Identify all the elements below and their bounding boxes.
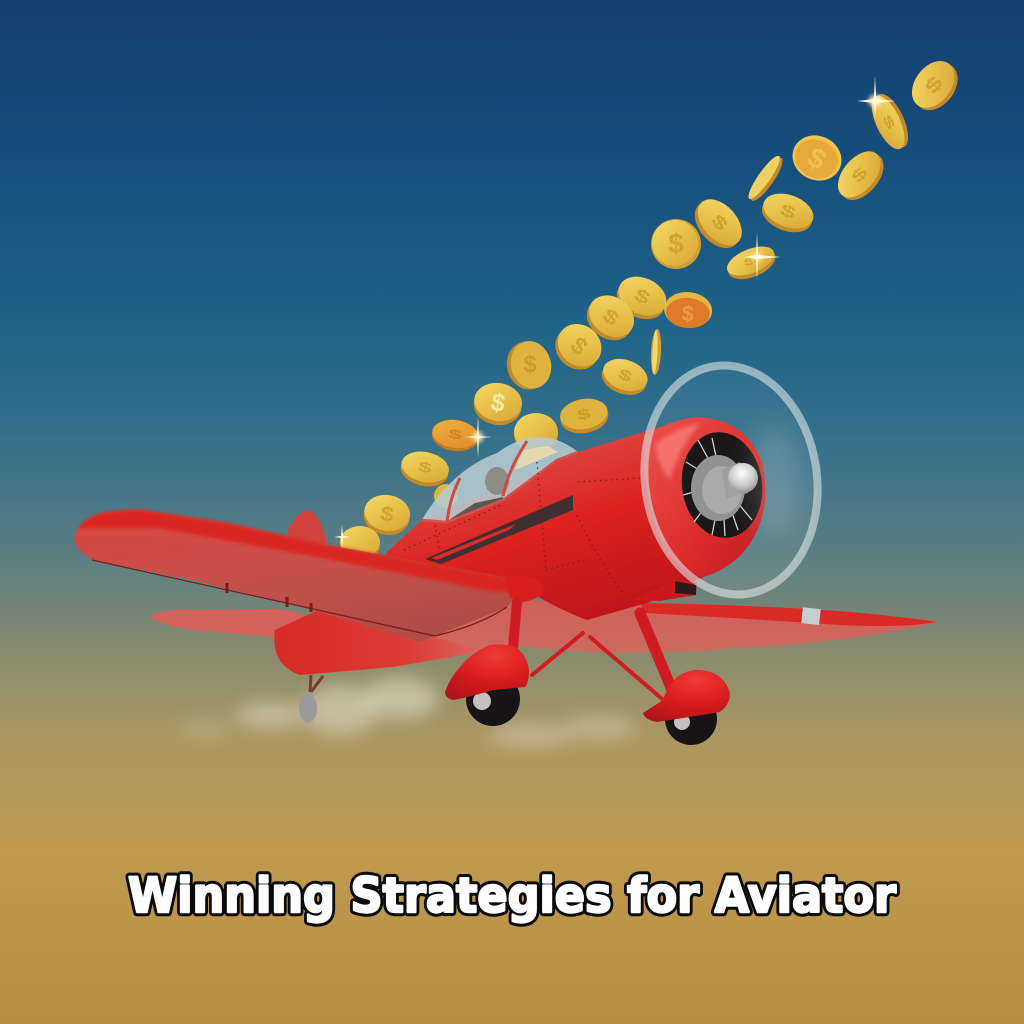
- exhaust smoke: [179, 678, 636, 746]
- coin 12: [579, 287, 642, 349]
- coin 4: $: [848, 162, 872, 186]
- fuselage: [387, 417, 706, 620]
- title: Winning Strategies for Aviator: [128, 868, 896, 924]
- coin 11 orange: $: [681, 301, 695, 326]
- tail wheel: [299, 675, 323, 723]
- coin 3: [785, 127, 849, 189]
- coin 10: $: [631, 284, 654, 309]
- leading edge band: [78, 510, 523, 592]
- wing band: [801, 607, 821, 625]
- coin 7: $: [707, 210, 732, 235]
- coin 9: [723, 241, 780, 285]
- coin 20 orange: $: [447, 426, 463, 443]
- near wing: [74, 510, 523, 642]
- far wing leading edge: [640, 603, 937, 626]
- engine opening: [675, 427, 769, 543]
- coin 9: $: [742, 252, 760, 269]
- radial engine: [683, 438, 752, 536]
- coin 1: $: [921, 72, 948, 98]
- coin 5: [744, 153, 787, 204]
- coin 15: [597, 353, 652, 401]
- panel rivets: [404, 462, 640, 595]
- coin 3: $: [803, 141, 831, 176]
- coin 23: $: [378, 501, 396, 526]
- coin 6: [757, 187, 818, 239]
- coin 18: [471, 379, 525, 429]
- coin 14: [547, 315, 610, 378]
- coin 8: [651, 219, 701, 269]
- flap lines: [92, 560, 507, 636]
- propeller spinner: [722, 462, 758, 498]
- title: Winning Strategies for Aviator: [128, 868, 896, 924]
- coin 10: [610, 269, 673, 327]
- coin 16: [502, 336, 556, 394]
- coin 22: [434, 484, 458, 508]
- black stripe: [425, 495, 573, 564]
- coin trail: [334, 53, 966, 561]
- canopy: [422, 437, 578, 522]
- coin 7: [686, 191, 750, 256]
- wing root fillet: [505, 576, 545, 602]
- right wheel fairing: [643, 670, 730, 722]
- coin 23: [361, 491, 413, 539]
- propeller disc: [630, 354, 832, 606]
- rear fuselage: [274, 600, 500, 675]
- pilot: [447, 446, 558, 522]
- coin 6: $: [778, 200, 799, 223]
- coin 24: [340, 526, 380, 561]
- right wheel: [665, 693, 717, 745]
- coin 15: $: [616, 366, 634, 386]
- coin 2: $: [880, 113, 897, 131]
- coin 18: $: [489, 388, 507, 418]
- left wheel fairing: [445, 644, 529, 700]
- coin 17: $: [576, 406, 592, 424]
- coin 12: $: [599, 304, 623, 330]
- far wing and centre section: [433, 600, 937, 653]
- coin 20 orange: [430, 417, 480, 454]
- coin 21: $: [417, 459, 433, 477]
- left wheel: [466, 672, 520, 726]
- cowl highlight: [655, 424, 700, 480]
- coin 1: [903, 53, 966, 118]
- exhaust scoop: [633, 580, 697, 601]
- tail fin: [287, 510, 327, 556]
- horizontal stabiliser: [150, 609, 322, 640]
- coin 8: $: [668, 228, 684, 259]
- airplane: [74, 354, 937, 745]
- coin 13 edge-on: [650, 329, 662, 375]
- coin 11 orange: [663, 290, 714, 330]
- coin 2: [865, 89, 915, 154]
- coin 21: [398, 447, 452, 491]
- coin 14: $: [565, 332, 593, 361]
- coin 19: [514, 413, 558, 454]
- sparkles: [334, 76, 895, 548]
- landing gear struts: [513, 602, 675, 710]
- coin 16: $: [523, 351, 537, 378]
- coin 17: [558, 395, 611, 437]
- coin 4: [830, 143, 892, 208]
- engine cowling: [644, 417, 769, 577]
